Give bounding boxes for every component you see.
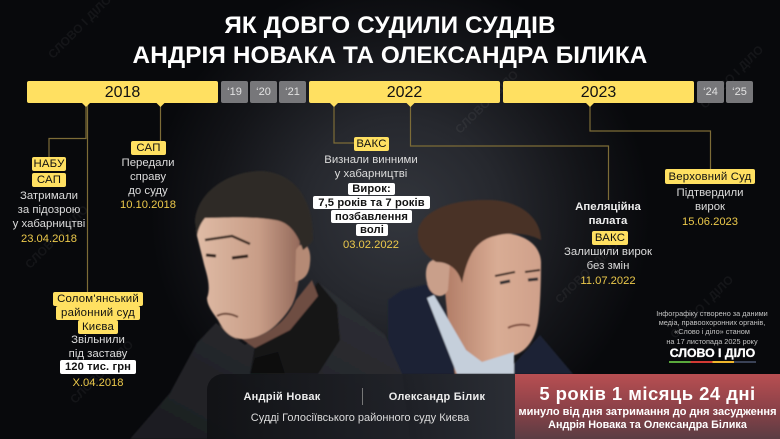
event: appeal 11.07.2022 (564, 201, 652, 287)
event: appeal 11.07.2022: без змін (587, 260, 629, 272)
source note: на 17 листопада 2025 року (666, 337, 758, 346)
event: guilty verdict 03.02.2022: волі (360, 224, 384, 236)
text: СЛОВО І ДІЛО (697, 43, 766, 111)
event: guilty verdict 03.02.2022 (313, 137, 430, 251)
event: detention 23.04.2018: Затримали (20, 190, 78, 202)
text: СЛОВО І ДІЛО (67, 338, 136, 406)
summary panel (515, 374, 780, 439)
source note: «Слово і діло» станом (674, 327, 750, 336)
event: guilty verdict 03.02.2022: Вирок: (352, 183, 391, 195)
timeline: 2018 (105, 84, 140, 101)
timeline (27, 81, 753, 103)
event: detention 23.04.2018: у хабарництві (13, 218, 85, 230)
event: case to court 10.10.2018: справу (130, 171, 166, 183)
event: case to court 10.10.2018: до суду (128, 185, 168, 197)
event: bail X.04.2018: під заставу (69, 348, 127, 360)
event: appeal 11.07.2022: Апеляційна (575, 201, 641, 213)
event: bail X.04.2018: X.04.2018 (72, 377, 124, 389)
event: bail X.04.2018: Києва (82, 321, 114, 333)
event: appeal 11.07.2022: палата (589, 215, 627, 227)
event: detention 23.04.2018 (12, 157, 85, 245)
text: СЛОВО І ДІЛО (552, 238, 621, 306)
title: ЯК ДОВГО СУДИЛИ СУДДІВ (224, 12, 556, 39)
logo: СЛОВО І ДІЛО (670, 347, 755, 360)
names panel: Судді Голосіївського районного суду Києва (251, 412, 469, 424)
event: bail X.04.2018: Солом'янський (57, 293, 139, 305)
event: bail X.04.2018: 120 тис. грн (65, 361, 131, 373)
summary panel: Андрія Новака та Олександра Білика (548, 419, 747, 431)
event: Supreme Court 15.06.2023: Верховний Суд (668, 171, 752, 183)
event: guilty verdict 03.02.2022: ВАКС (356, 138, 387, 150)
timeline: ‘24 (703, 86, 718, 98)
event: guilty verdict 03.02.2022: позбавлення (335, 211, 408, 223)
timeline: 2023 (581, 84, 616, 101)
event: guilty verdict 03.02.2022: Визнали винними (324, 154, 418, 166)
title: АНДРІЯ НОВАКА ТА ОЛЕКСАНДРА БІЛИКА (133, 42, 647, 69)
event: guilty verdict 03.02.2022: у хабарництві (335, 168, 407, 180)
summary panel: минуло від дня затримання до дня засудження (518, 406, 776, 418)
timeline: ‘25 (732, 86, 747, 98)
event: detention 23.04.2018: за підозрою (18, 204, 80, 216)
event: Supreme Court 15.06.2023 (665, 169, 755, 228)
event: case to court 10.10.2018 (120, 141, 176, 211)
event: Supreme Court 15.06.2023: вирок (695, 201, 725, 213)
event: appeal 11.07.2022: Залишили вирок (564, 246, 652, 258)
text: СЛОВО І ДІЛО (452, 68, 521, 136)
timeline: ‘19 (227, 86, 242, 98)
text: СЛОВО І ДІЛО (667, 273, 736, 341)
event: detention 23.04.2018: 23.04.2018 (21, 233, 77, 245)
source note: Інфографіку створено за даними (656, 309, 768, 318)
title (133, 12, 647, 69)
event: case to court 10.10.2018: Передали (122, 157, 174, 169)
timeline: ‘21 (285, 86, 300, 98)
source note: медіа, правоохоронних органів, (659, 318, 765, 327)
event: Supreme Court 15.06.2023: Підтвердили (677, 187, 743, 199)
names panel: Андрій Новак (243, 391, 321, 403)
source note (656, 309, 768, 346)
text: СЛОВО І ДІЛО (22, 203, 91, 271)
summary panel: 5 років 1 місяць 24 дні (539, 383, 756, 404)
event: Supreme Court 15.06.2023: 15.06.2023 (682, 216, 738, 228)
event: guilty verdict 03.02.2022: 7,5 років та 7 років (318, 197, 425, 209)
event: detention 23.04.2018: НАБУ (33, 158, 65, 170)
event: appeal 11.07.2022: 11.07.2022 (580, 275, 636, 287)
names panel (207, 374, 515, 439)
event: case to court 10.10.2018: САП (136, 142, 161, 154)
event: bail X.04.2018: Звільнили (71, 334, 125, 346)
event: guilty verdict 03.02.2022: 03.02.2022 (343, 239, 399, 251)
timeline: ‘20 (256, 86, 271, 98)
event: case to court 10.10.2018: 10.10.2018 (120, 199, 176, 211)
event: bail X.04.2018 (53, 292, 143, 389)
event: bail X.04.2018: районний суд (61, 307, 135, 319)
timeline: 2022 (387, 84, 422, 101)
event: appeal 11.07.2022: ВАКС (595, 232, 625, 244)
names panel: Олександр Білик (389, 391, 485, 403)
event: detention 23.04.2018: САП (37, 174, 61, 186)
